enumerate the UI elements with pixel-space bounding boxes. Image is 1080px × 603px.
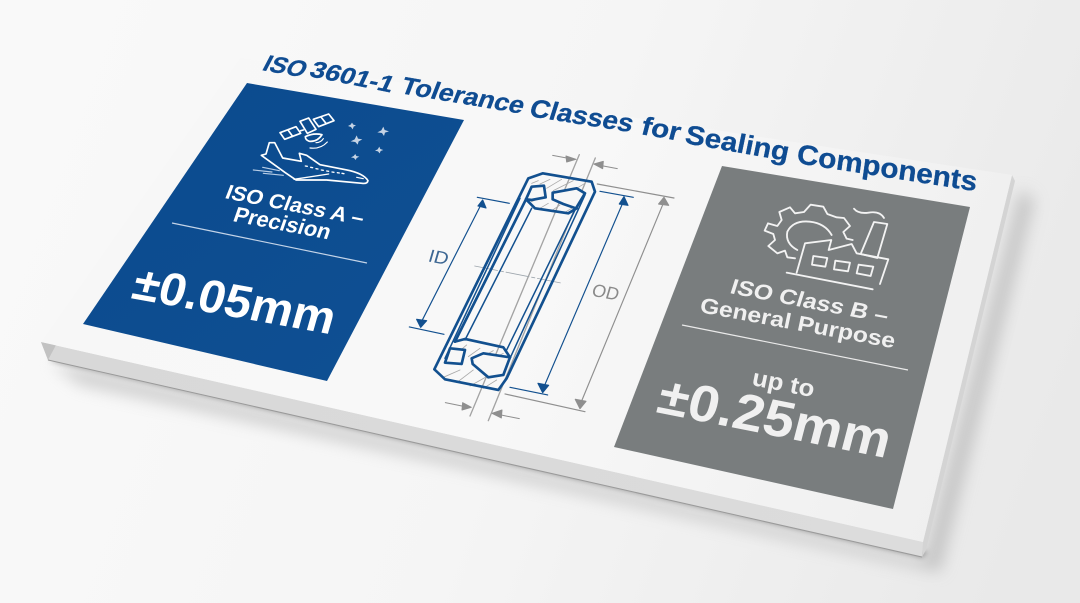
label: ID: ID	[426, 246, 451, 269]
divider	[172, 223, 367, 263]
technical drawing: seal cross-section	[409, 155, 674, 421]
value: up to ±0.25mm: up to	[750, 365, 817, 403]
OD inner dimension	[510, 191, 633, 395]
label: ISO Class B – General Purpose: General Purpose	[698, 293, 898, 353]
card shadow	[48, 190, 1034, 572]
centre axis lines	[470, 155, 595, 421]
panel: ISO Class B	[614, 166, 970, 509]
hatching	[443, 179, 585, 388]
title: 3601-1	[305, 57, 399, 98]
title	[258, 51, 979, 197]
icon: gear and factory	[765, 205, 888, 289]
title: for	[638, 113, 684, 146]
title: ISO	[258, 51, 312, 83]
label: ISO Class A – Precision: ISO Class A –	[222, 181, 368, 230]
title: Tolerance	[397, 73, 529, 119]
card	[41, 58, 1015, 557]
title: Sealing	[683, 120, 792, 167]
label: ISO Class A – Precision: Precision	[230, 202, 335, 244]
seal outline	[434, 173, 595, 390]
label: ISO Class B – General Purpose	[698, 274, 898, 353]
divider	[682, 325, 908, 370]
OD outer dimension	[505, 184, 674, 412]
panel: ISO Class A	[83, 83, 464, 381]
value: up to ±0.25mm: ±0.25mm	[652, 367, 898, 469]
icon: satellite, aircraft and stars	[253, 114, 389, 183]
title: Classes	[526, 95, 637, 138]
value: ±0.05mm: ±0.05mm	[127, 258, 342, 344]
ID dimension	[409, 197, 509, 334]
title: Components	[795, 138, 979, 197]
label: ISO Class B – General Purpose: ISO Class B –	[727, 274, 892, 328]
gap arrows	[445, 155, 617, 419]
label: OD: OD	[590, 280, 622, 304]
